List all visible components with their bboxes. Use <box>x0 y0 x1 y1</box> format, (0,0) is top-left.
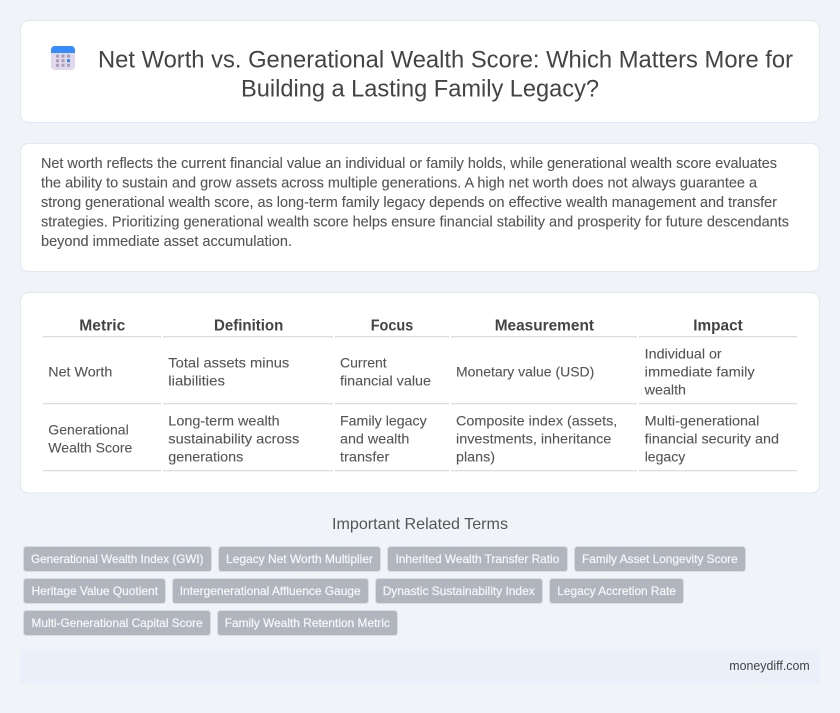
table row: Net Worth: immediate family <box>645 363 755 379</box>
footer bar <box>20 649 820 683</box>
table row: Generational Wealth Score: and wealth <box>340 430 409 446</box>
table row: Net Worth: Current <box>340 354 387 370</box>
title: Building a Lasting Family Legacy? <box>241 76 599 102</box>
related terms tags <box>24 546 746 636</box>
table row: Generational Wealth Score: Composite index (assets, <box>456 412 617 428</box>
text block: summary paragraph: beyond immediate asset accumulation. <box>41 234 292 250</box>
footer bar: moneydiff.com <box>729 659 810 673</box>
table row: Net Worth: Net Worth <box>48 363 112 379</box>
table header row: Focus <box>371 318 413 335</box>
table header row: Impact <box>693 318 743 335</box>
text block: summary paragraph: strategies. Prioritizing generational wealth score helps ensure financial stability and prosperity for future descendants <box>41 214 789 230</box>
table row: Net Worth: wealth <box>644 381 686 397</box>
table row: Net Worth <box>43 345 797 404</box>
related terms tags: Inherited Wealth Transfer Ratio <box>396 552 560 566</box>
table header row <box>43 318 797 337</box>
related terms tags: Heritage Value Quotient <box>32 584 159 598</box>
related terms tags: Intergenerational Affluence Gauge <box>180 584 361 598</box>
table header row: Measurement <box>495 318 595 335</box>
text block: summary paragraph: strong generational wealth score, as long-term family legacy depends on effective wealth management and transfer <box>41 195 777 211</box>
table row: Generational Wealth Score: transfer <box>340 448 390 464</box>
table row: Net Worth: financial value <box>340 372 431 388</box>
title: Net Worth vs. Generational Wealth Score: Which Matters More for <box>98 46 793 74</box>
text block: summary paragraph <box>41 156 789 250</box>
table row: Generational Wealth Score: financial security and <box>645 430 779 446</box>
table row: Generational Wealth Score: Family legacy <box>340 412 427 428</box>
table row: Generational Wealth Score <box>43 412 797 471</box>
table row: Generational Wealth Score: Wealth Score <box>48 439 133 455</box>
text block: summary paragraph: the ability to sustain and grow assets across multiple generations. A high net worth does not always guarantee a <box>41 176 757 192</box>
related terms tags: Multi-Generational Capital Score <box>32 616 203 630</box>
related terms tags: Family Asset Longevity Score <box>582 552 738 566</box>
table row: Net Worth: Monetary value (USD) <box>456 363 594 379</box>
heading: Important Related Terms: Important Related Terms <box>332 516 508 533</box>
table row: Generational Wealth Score: sustainability across <box>168 430 299 446</box>
table row: Generational Wealth Score: legacy <box>645 448 685 464</box>
table row: Generational Wealth Score: Generational <box>48 421 129 437</box>
table row: Net Worth: liabilities <box>168 372 225 388</box>
table row: Generational Wealth Score: plans) <box>456 448 495 464</box>
title <box>98 46 793 102</box>
table row: Generational Wealth Score: investments, inheritance <box>456 430 612 446</box>
table header row: Metric <box>79 318 125 335</box>
panel: summary <box>20 144 820 272</box>
related terms tags: Dynastic Sustainability Index <box>383 584 535 598</box>
panel: comparison table <box>20 292 820 493</box>
table row: Generational Wealth Score: Multi-generational <box>645 412 759 428</box>
table header row: Definition <box>214 318 283 335</box>
icon: calendar <box>51 46 75 70</box>
related terms tags: Legacy Accretion Rate <box>557 584 676 598</box>
text block: summary paragraph: Net worth reflects the current financial value an individual or family holds, while generational wealth score evaluates <box>41 156 777 172</box>
table row: Generational Wealth Score: Long-term wealth <box>168 412 280 428</box>
related terms tags: Legacy Net Worth Multiplier <box>226 552 373 566</box>
table row: Net Worth: Total assets minus <box>168 354 289 370</box>
panel: title header <box>20 20 820 122</box>
related terms tags: Generational Wealth Index (GWI) <box>31 552 204 566</box>
table row: Generational Wealth Score: generations <box>168 448 243 464</box>
related terms tags: Family Wealth Retention Metric <box>225 616 390 630</box>
table row: Net Worth: Individual or <box>645 345 722 361</box>
